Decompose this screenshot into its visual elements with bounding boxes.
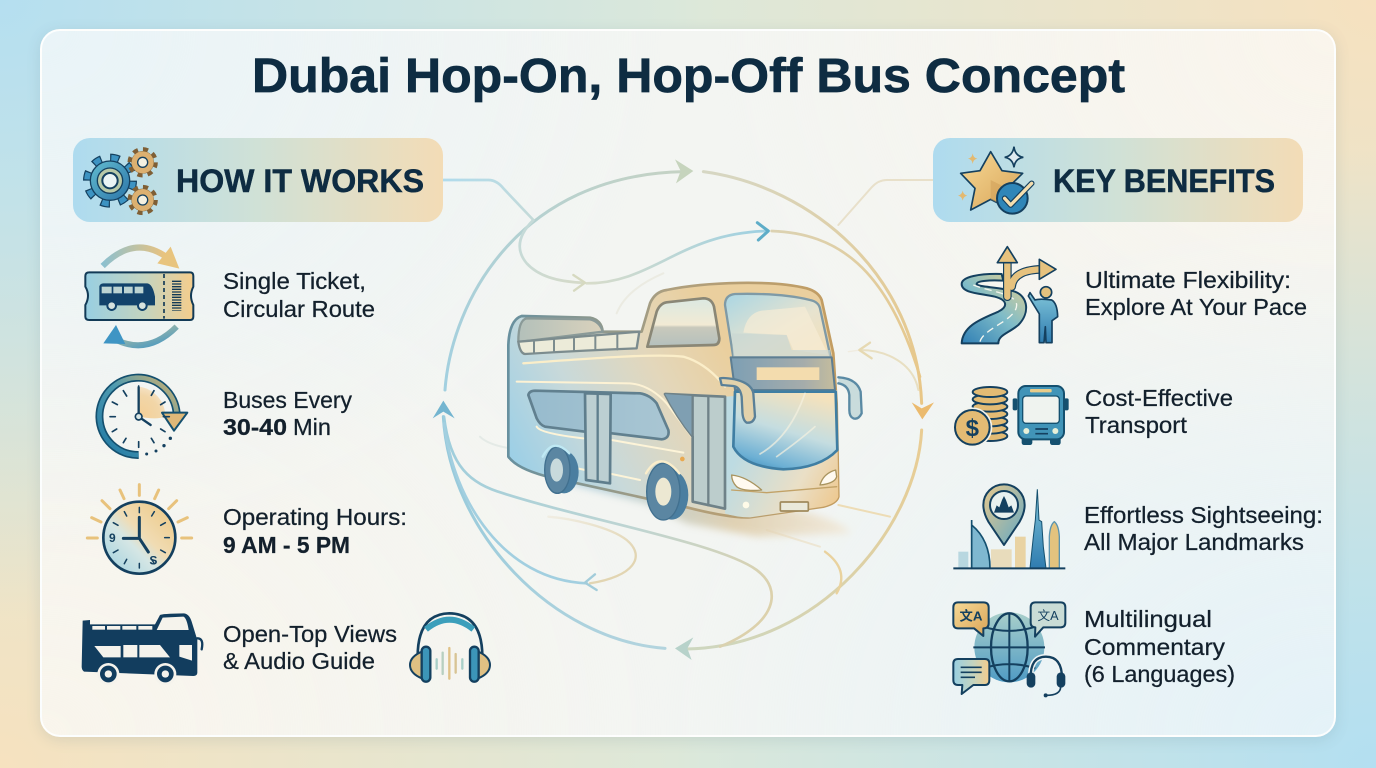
upper side window (647, 298, 719, 347)
item: ultimate flexibility (962, 247, 1307, 343)
lights and plate (732, 475, 762, 490)
item: open-top views (82, 613, 490, 685)
heading: how it works: HOW IT WORKS (176, 163, 424, 199)
text: effortless sightseeing: All Major Landmarks (1084, 529, 1304, 555)
title: Dubai Hop-On, Hop-Off Bus Concept (252, 50, 1125, 103)
item: single ticket (85, 247, 375, 345)
text: open-top views: Open-Top Views (223, 621, 397, 647)
heading: key benefits: KEY BENEFITS (1053, 163, 1275, 199)
upper windscreen (725, 294, 831, 357)
mirrors (720, 378, 755, 423)
panel: how it works (73, 138, 490, 685)
rear upper seat (518, 318, 603, 342)
text: ultimate flexibility (1085, 267, 1307, 320)
text: cost-effective (1085, 385, 1233, 438)
text: buses every (223, 387, 352, 440)
icon: skyline with map pin (953, 484, 1065, 568)
heading: how it works (73, 138, 443, 222)
text: multilingual commentary: Multilingual (1084, 606, 1212, 632)
text: single ticket: Single Ticket, (223, 268, 366, 294)
icon: coins and bus: $ (966, 415, 979, 442)
text: cost-effective: Transport (1085, 412, 1188, 438)
text: open-top views: & Audio Guide (223, 648, 375, 674)
item: multilingual commentary (953, 602, 1235, 697)
text: operating hours (223, 504, 407, 558)
icon: globe with speech bubbles and headset: 文A (1037, 609, 1059, 623)
icon: coins and bus (952, 386, 1069, 447)
icon: globe with speech bubbles and headset: 文A (960, 608, 983, 624)
text: multilingual commentary (1084, 606, 1235, 687)
text: single ticket (223, 268, 375, 322)
item: operating hours (87, 485, 407, 574)
text: multilingual commentary: (6 Languages) (1084, 661, 1235, 687)
text: single ticket: Circular Route (223, 296, 375, 322)
text: buses every: Buses Every (223, 387, 352, 413)
text: multilingual commentary: Commentary (1084, 634, 1226, 660)
text: operating hours: Operating Hours: (223, 504, 407, 530)
icon: diverging road and person (962, 247, 1058, 343)
text: effortless sightseeing (1084, 502, 1323, 555)
icon: sun clock: S (149, 554, 157, 568)
icon: clock with arrow (99, 378, 187, 455)
text: ultimate flexibility: Ultimate Flexibility: (1085, 267, 1291, 293)
item: effortless sightseeing (953, 484, 1323, 568)
side windows and doors (528, 391, 669, 439)
wheels (549, 451, 579, 493)
item: cost-effective (952, 385, 1233, 447)
icon: globe with speech bubbles and headset (953, 602, 1065, 697)
text: ultimate flexibility: Explore At Your Pace (1085, 294, 1307, 320)
heading: key benefits (933, 138, 1303, 222)
destination band (731, 357, 835, 390)
icon: headphones (410, 613, 490, 682)
text: buses every: 30-40 (223, 414, 287, 440)
panel: key benefits (933, 138, 1323, 697)
text: operating hours: 9 AM - 5 PM (223, 532, 350, 558)
icon: sun clock (87, 485, 192, 574)
text: open-top views (223, 621, 397, 674)
icon: open-top bus (82, 613, 202, 685)
text: buses every: Min (293, 414, 331, 440)
icon: sun clock: 9 (109, 531, 116, 545)
text: effortless sightseeing: Effortless Sightseeing: (1084, 502, 1323, 528)
icon: ticket with circular arrows (85, 247, 193, 345)
text: cost-effective: Cost-Effective (1085, 385, 1233, 411)
lower windscreen (733, 392, 837, 469)
central bus illustration (508, 283, 862, 537)
item: buses every (99, 378, 352, 455)
central route arrows (433, 159, 934, 660)
